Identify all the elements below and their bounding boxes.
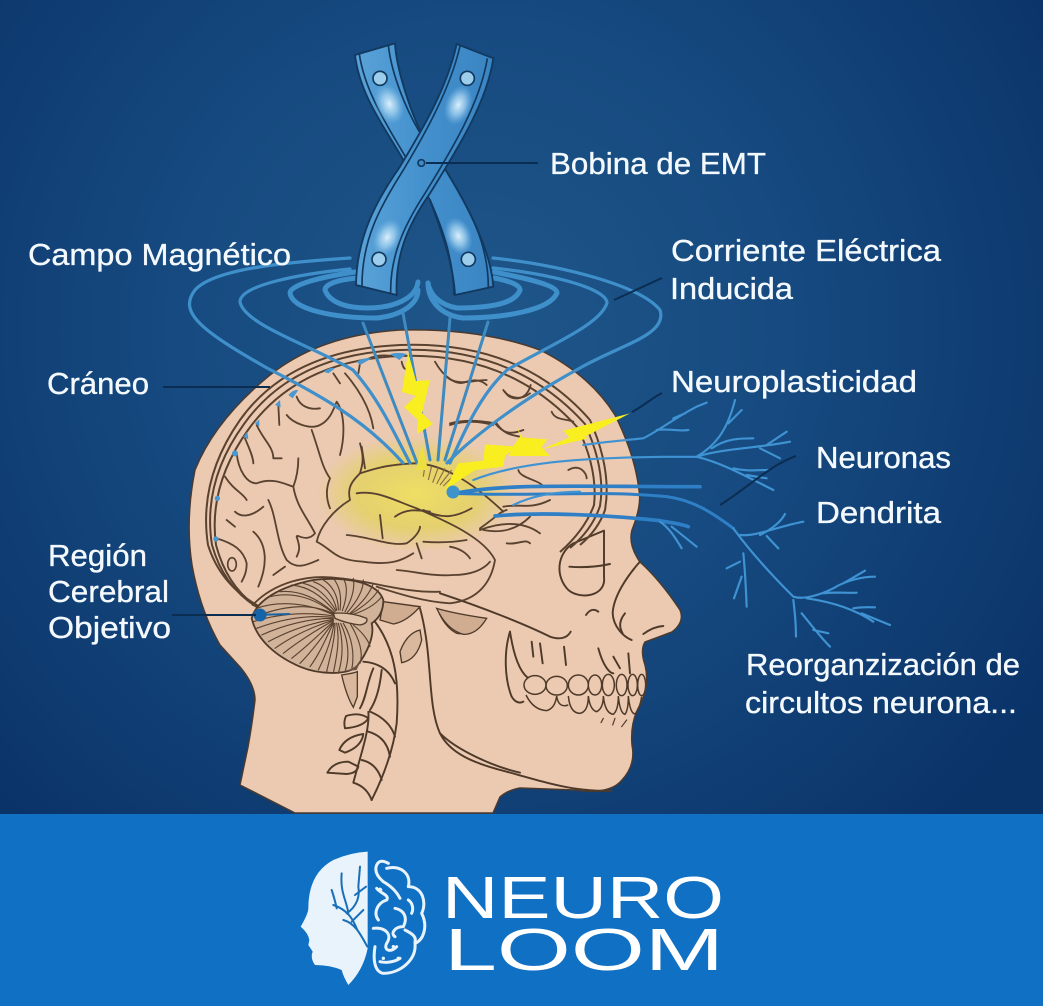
cerebellum node (254, 608, 290, 622)
label: Reorganización de circuitos neuronales: circultos neurona... (745, 685, 1017, 720)
logo wordmark (442, 865, 724, 983)
label: Reorganización de circuitos neuronales: Reorganzización de (746, 647, 1020, 682)
jaw line (440, 733, 612, 791)
label: Neuronas (720, 440, 951, 505)
brain folds (217, 355, 530, 605)
cranium layers (206, 345, 607, 617)
cerebellum (252, 578, 383, 673)
label: Región Cerebral Objetivo: Cerebral (48, 574, 169, 609)
footer band (0, 814, 1043, 1006)
frontal cortex folds (447, 377, 587, 533)
label: Reorganización de circuitos neuronales (745, 647, 1020, 720)
label: Campo Magnético: Campo Magnético (28, 237, 291, 272)
label: Región Cerebral Objetivo: Región (48, 538, 147, 573)
nose lines (613, 562, 640, 640)
label: Neuronas: Neuronas (816, 440, 951, 475)
label: Región Cerebral Objetivo (48, 538, 256, 645)
small fold (228, 558, 236, 571)
label: Corriente Eléctrica Inducida (614, 233, 942, 306)
lower branch (733, 528, 890, 625)
head silhouette (189, 330, 681, 813)
upper branch (583, 403, 707, 445)
eye socket (559, 531, 604, 595)
logo wordmark: NEURO (442, 865, 724, 931)
logo icon (301, 852, 425, 985)
skull and face lines (440, 531, 663, 791)
front strand (356, 44, 493, 295)
target node (446, 486, 460, 498)
label: Cráneo: Cráneo (47, 366, 149, 401)
middle branch (473, 400, 790, 490)
face half (301, 852, 368, 985)
label: Corriente Eléctrica Inducida: Corriente Eléctrica (671, 233, 942, 268)
dendrites (455, 400, 890, 647)
eye lid (569, 564, 610, 567)
insula rays (423, 465, 457, 486)
logo wordmark: LOOM (444, 917, 724, 983)
TMS coil (355, 43, 493, 295)
label: Neuroplasticidad (632, 364, 917, 412)
blue ventricle spots (213, 353, 407, 542)
neck and jaw lines (327, 602, 520, 800)
lightning bolts (445, 413, 630, 490)
target region glow (317, 435, 517, 552)
vertical bolt (402, 352, 433, 470)
neural tree (332, 867, 367, 947)
back strand (355, 43, 493, 295)
label: Neuroplasticidad: Neuroplasticidad (671, 364, 917, 399)
label: Región Cerebral Objetivo: Objetivo (48, 610, 171, 645)
label: Dendrita: Dendrita (816, 495, 942, 530)
magnetic field lines (190, 258, 661, 463)
main axons (455, 486, 700, 493)
cheekbone (440, 593, 571, 638)
label: Corriente Eléctrica Inducida: Inducida (670, 271, 794, 306)
brain (213, 353, 587, 605)
rays converging on target (363, 313, 488, 463)
brain half (373, 861, 425, 973)
teeth (524, 674, 646, 714)
label: Bobina de EMT: Bobina de EMT (550, 146, 766, 181)
